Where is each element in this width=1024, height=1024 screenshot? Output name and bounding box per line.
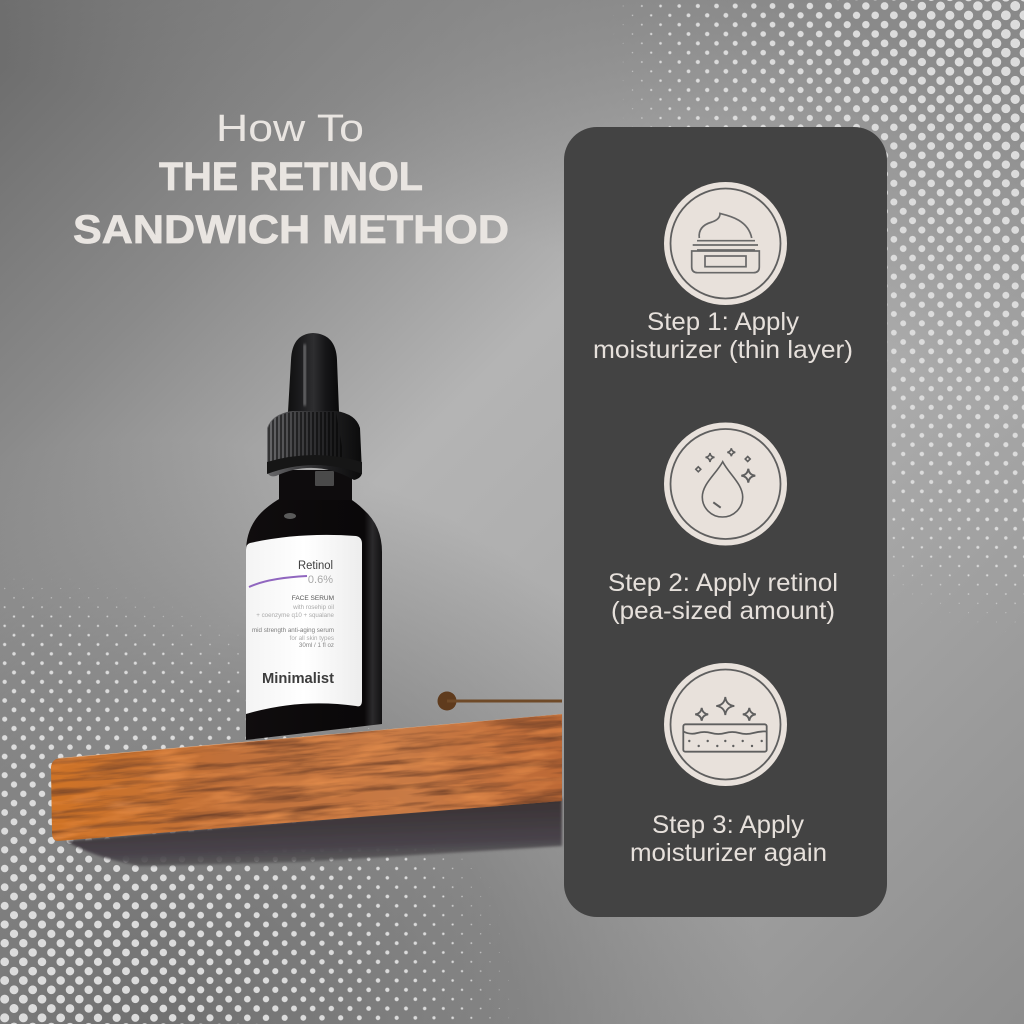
bottle shoulder highlight	[284, 513, 296, 519]
serum bottle	[246, 333, 382, 740]
collar ribs	[268, 412, 344, 462]
title line: The Retinol: THE RETINOL	[159, 155, 423, 199]
bottle neck	[279, 470, 352, 500]
shelf shadow	[66, 798, 562, 866]
step 3 text: Step 3: Apply	[652, 811, 805, 839]
step 2 text: (pea-sized amount)	[611, 597, 835, 625]
label text: skin types: for all skin types	[290, 635, 334, 642]
step 2	[608, 422, 838, 625]
wooden shelf	[51, 714, 562, 841]
label text: 0.6%: 0.6%	[308, 574, 333, 586]
step 1 text: moisturizer (thin layer)	[593, 336, 853, 364]
halftone dots: bottom left	[0, 578, 509, 1024]
collar lower rim	[267, 455, 362, 474]
neck highlight	[315, 471, 334, 486]
step 1 text: Step 1: Apply	[647, 308, 800, 336]
panel: steps	[564, 127, 887, 917]
bulb highlight	[304, 344, 306, 406]
step 3	[630, 663, 827, 867]
title line: Sandwich Method: SANDWICH METHOD	[73, 208, 509, 252]
label text: strength: mid strength anti-aging serum	[252, 627, 334, 634]
label text: Retinol: Retinol	[298, 560, 333, 572]
connector line	[447, 700, 562, 702]
step 1	[593, 182, 853, 364]
title line: How To: How To	[216, 108, 364, 150]
connector dot	[438, 692, 456, 710]
icon: skin layer with sparkles	[664, 663, 787, 786]
label text: ingredients: with rosehip oil	[292, 604, 334, 611]
dropper bulb	[288, 333, 339, 412]
step 1 text	[593, 308, 853, 364]
panel background	[564, 127, 887, 917]
label text: ingredients line two: + coenzyme q10 + squalane	[256, 612, 335, 619]
step 3 text: moisturizer again	[630, 839, 827, 867]
step 2 text: Step 2: Apply retinol	[608, 569, 838, 597]
title	[73, 108, 509, 252]
label text: brand: Minimalist	[262, 671, 334, 687]
label text: volume: 30ml / 1 fl oz	[299, 642, 334, 649]
icon: retinol drop	[664, 422, 787, 546]
connector dot and line	[438, 692, 562, 710]
label background	[246, 535, 362, 714]
bottle label	[246, 535, 362, 714]
step 3 text	[630, 811, 827, 867]
bottle body	[246, 492, 382, 740]
label accent line	[249, 576, 307, 587]
icon: moisturizer jar	[664, 182, 787, 305]
halftone dots: top right	[614, 0, 1024, 632]
dropper collar	[267, 411, 362, 480]
label text: face serum: FACE SERUM	[292, 595, 334, 602]
step 2 text	[608, 569, 838, 625]
